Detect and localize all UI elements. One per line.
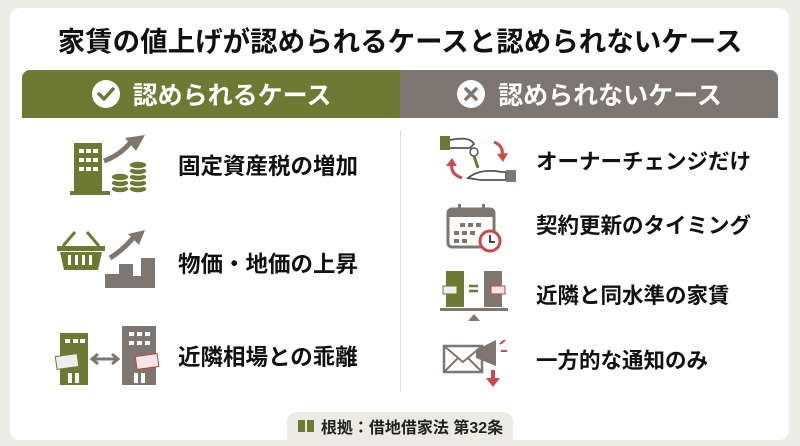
icon: envelope megaphone <box>442 339 507 387</box>
icon: basket and city <box>57 230 155 288</box>
icon: book <box>298 420 314 432</box>
text: item 7: 一方的な通知のみ <box>536 349 708 373</box>
footer: legal basis: 根拠：借地借家法 第32条 <box>321 420 503 437</box>
icon: buildings compare <box>54 326 160 385</box>
text: item 6: 近隣と同水準の家賃 <box>536 284 730 308</box>
text: item 5: 契約更新のタイミング <box>536 214 751 238</box>
header: approved <box>22 70 400 118</box>
icon: check <box>92 80 120 108</box>
title: 家賃の値上げが認められるケースと認められないケース <box>58 26 742 57</box>
text: item 1: 固定資産税の増加 <box>178 154 358 179</box>
icon: building with coins <box>70 135 146 195</box>
icon: key handover <box>440 136 516 182</box>
footer: legal basis <box>287 412 513 446</box>
text: item 4: オーナーチェンジだけ <box>536 150 751 174</box>
header: not approved <box>400 70 778 118</box>
icon: calendar clock <box>446 204 502 252</box>
icon: equal buildings on scale <box>440 271 508 321</box>
header: approved: 認められるケース <box>133 82 331 110</box>
text: item 3: 近隣相場との乖離 <box>178 345 358 370</box>
header: not approved: 認められないケース <box>498 82 722 110</box>
icon: cross <box>457 80 485 108</box>
text: item 2: 物価・地価の上昇 <box>178 252 358 277</box>
